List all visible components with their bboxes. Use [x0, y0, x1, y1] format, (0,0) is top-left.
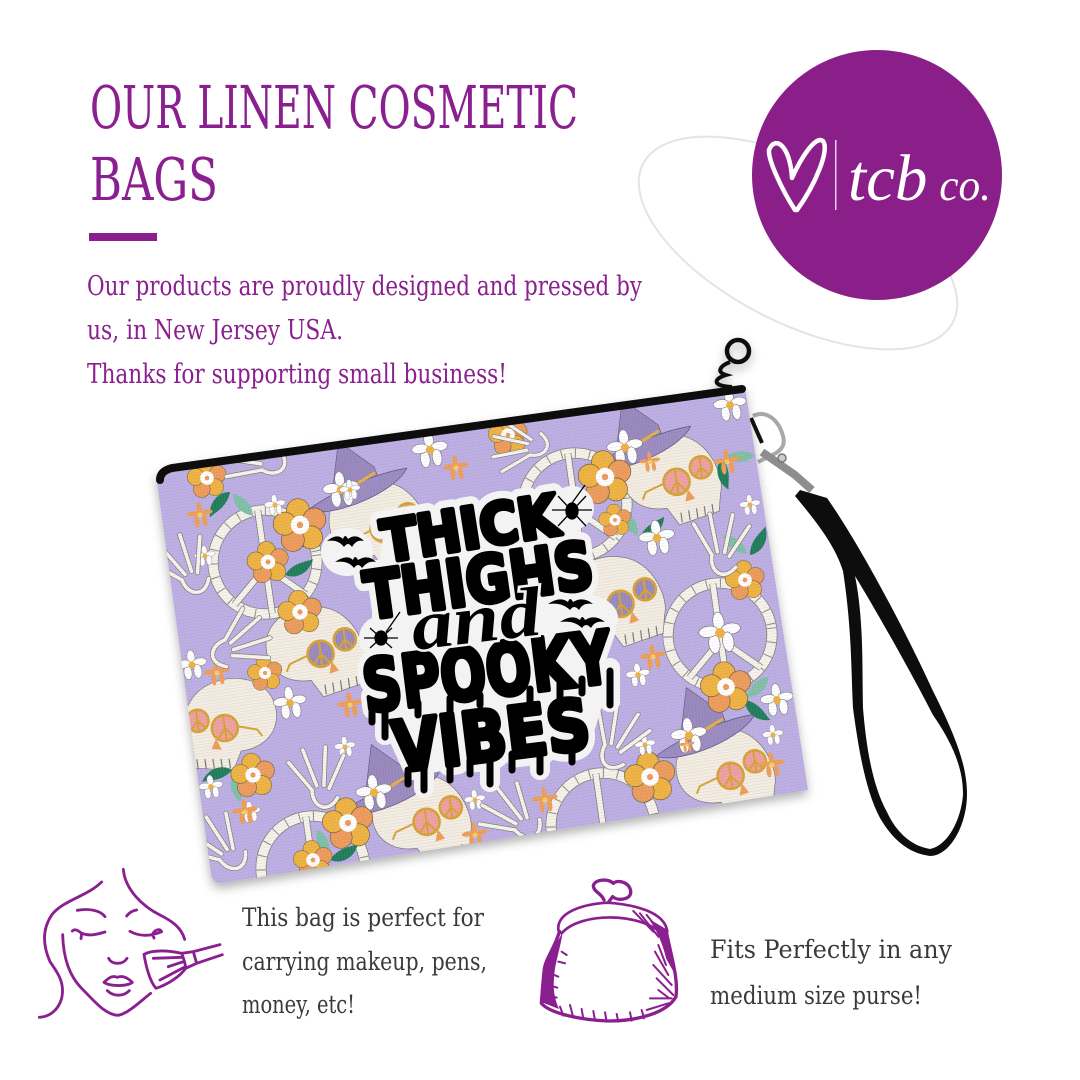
title: OUR LINEN COSMETIC [90, 73, 578, 142]
logo wordmark: tcbco. [848, 142, 991, 215]
icon: face with makeup brush [39, 869, 222, 1017]
logo badge [752, 50, 1002, 300]
sticker slogan [327, 483, 617, 790]
sticker backing: THIGHS [360, 529, 598, 635]
sticker slogan: SPOOKY [358, 615, 617, 729]
sticker backing: SPOOKY [358, 615, 617, 729]
bats [327, 536, 605, 628]
title [90, 73, 578, 214]
intro text: Our products are proudly designed and pressed by [87, 271, 643, 302]
title: BAGS [90, 145, 218, 214]
purse fit text: medium size purse! [710, 981, 922, 1010]
bag usage text: money, etc! [242, 990, 355, 1019]
intro text [87, 271, 643, 390]
sticker backing: VIBES [388, 683, 595, 789]
paint drips [372, 671, 610, 790]
zipper tape [160, 389, 742, 480]
zipper pull and ring [717, 340, 749, 387]
wristlet strap [795, 490, 967, 856]
bag fabric [157, 388, 808, 883]
bag [151, 338, 812, 894]
bag usage text: This bag is perfect for [242, 903, 484, 932]
sticker backing: THICK [377, 483, 565, 576]
sticker slogan: and [407, 573, 546, 666]
sticker slogan: THIGHS [360, 529, 598, 635]
intro text: Thanks for supporting small business! [87, 359, 507, 390]
intro text: us, in New Jersey USA. [87, 315, 343, 346]
sticker slogan: VIBES [388, 683, 595, 789]
metal clasp [751, 414, 812, 490]
icon: heart [769, 140, 825, 210]
spiders [364, 485, 592, 648]
decorative ellipse [607, 93, 989, 393]
title rule [89, 233, 157, 241]
purse fit text: Fits Perfectly in any [710, 935, 953, 964]
bag usage text [242, 903, 487, 1019]
bag print [140, 370, 840, 927]
purse fit text [710, 935, 953, 1010]
icon: coin purse [541, 880, 676, 1022]
sticker backing [321, 483, 618, 789]
logo divider [835, 140, 836, 210]
bag usage text: carrying makeup, pens, [242, 947, 487, 976]
sticker slogan: THICK [377, 483, 565, 576]
